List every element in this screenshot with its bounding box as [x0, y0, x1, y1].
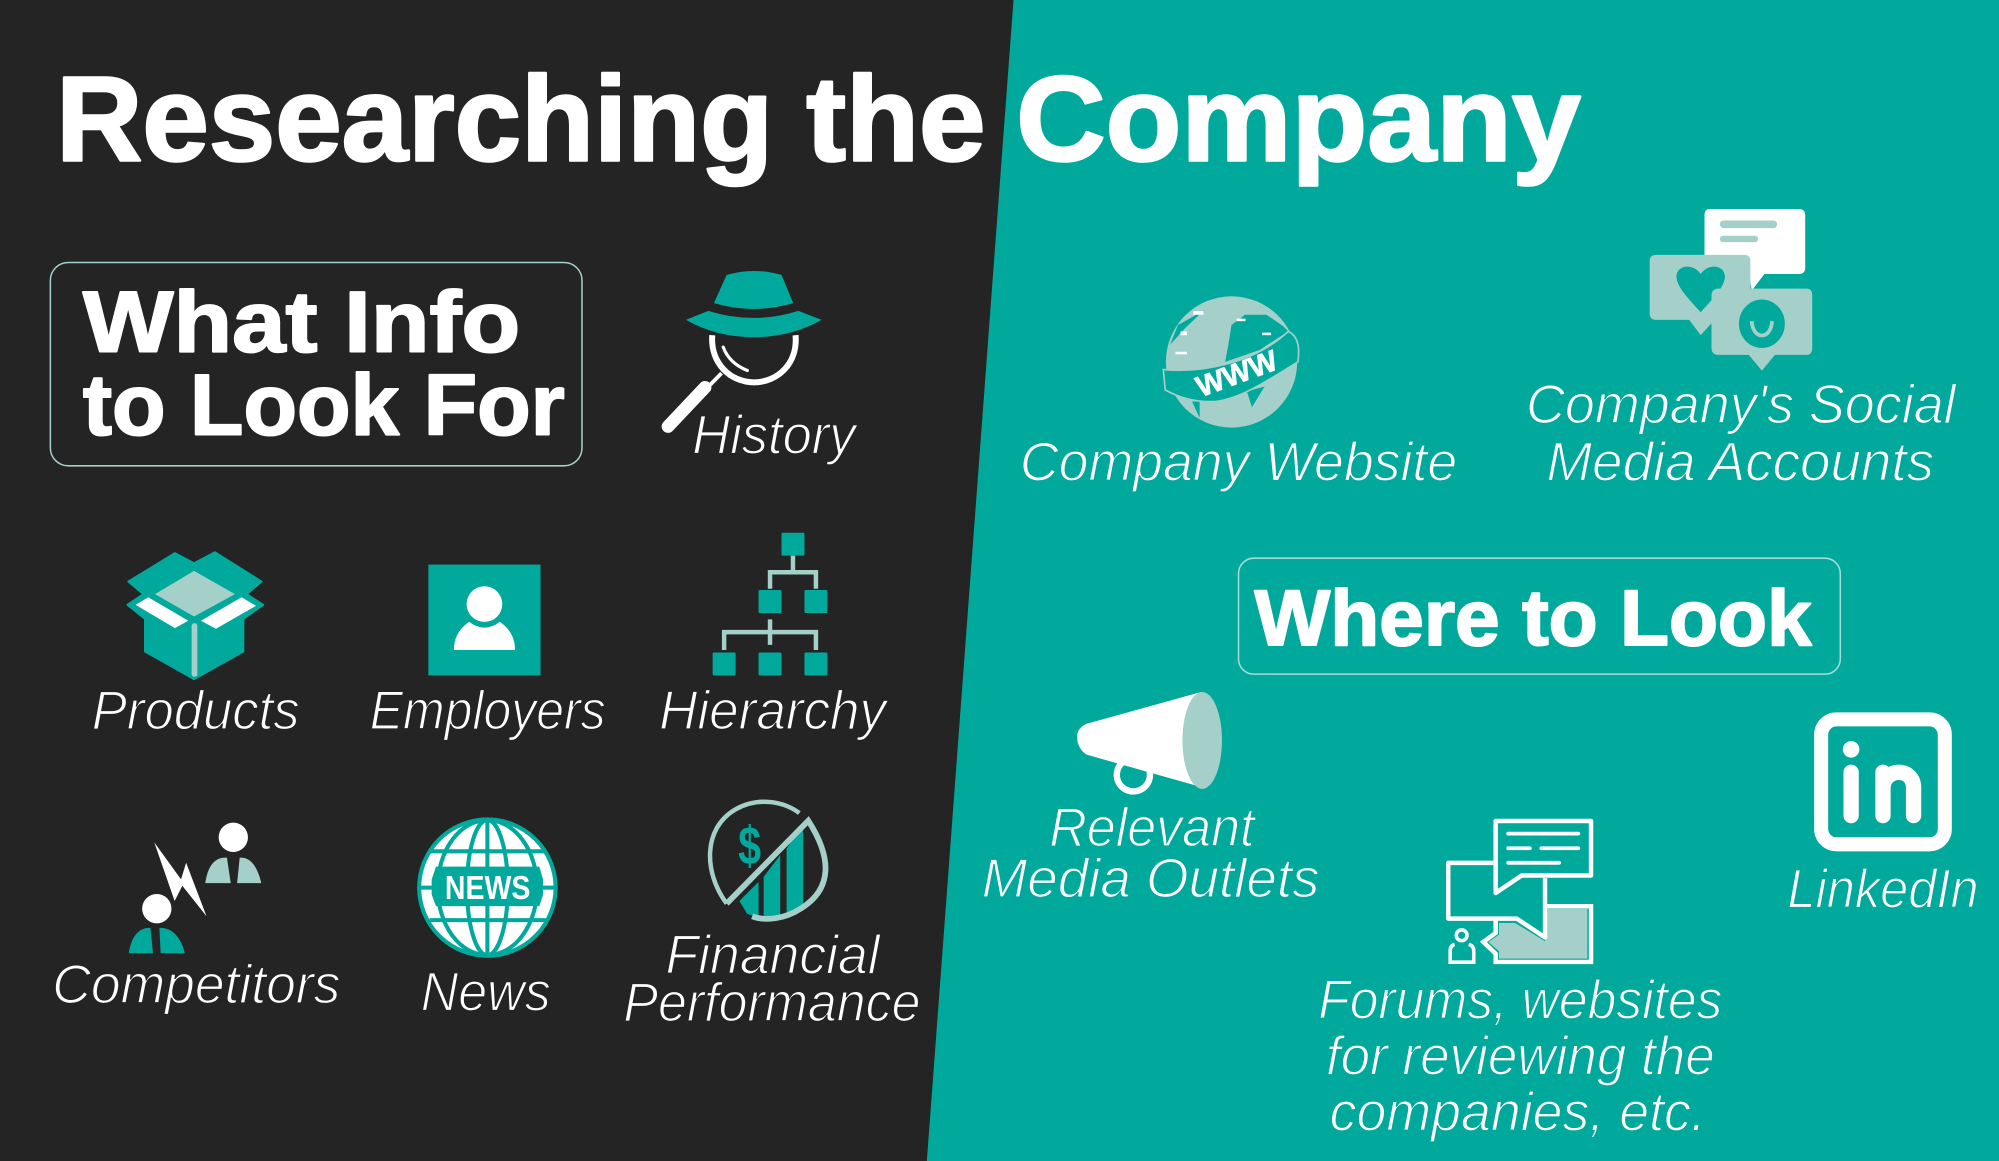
label: Company's Social Media Accounts: Company's Social [1526, 373, 1957, 435]
icon: forums and reviews [1448, 821, 1591, 962]
icon: website globe [1163, 296, 1299, 428]
icon: financial performance [710, 802, 826, 920]
title: Company [1016, 51, 1581, 187]
panel: where to look heading: Where to Look [1254, 573, 1813, 662]
label: History: History [692, 404, 859, 466]
panel: what info to look for heading: to Look For [83, 358, 565, 454]
label: Forums, websites for reviewing the companies, etc. [1318, 968, 1722, 1142]
panel: what info to look for heading [50, 263, 582, 466]
label: Financial Performance [623, 924, 920, 1033]
icon: employers [428, 565, 541, 675]
icon: news globe: NEWS [445, 870, 530, 907]
icon: hierarchy chart [713, 533, 827, 675]
label: Competitors: Competitors [52, 953, 340, 1015]
panel: where to look heading [1239, 558, 1840, 674]
label: Products: Products [92, 679, 300, 741]
label: Relevant Media Outlets: Relevant [1049, 796, 1257, 858]
label: News: News [421, 961, 551, 1023]
icon: social media bubbles [1650, 209, 1812, 370]
label: Forums, websites for reviewing the companies, etc.: for reviewing the [1326, 1024, 1715, 1086]
background: teal diagonal panel [927, 0, 1999, 1161]
label: Financial Performance: Performance [623, 971, 920, 1033]
label: Company's Social Media Accounts: Media Accounts [1546, 430, 1934, 492]
label: Employers: Employers [370, 679, 606, 741]
label: LinkedIn: LinkedIn [1787, 857, 1979, 919]
icon: history detective [668, 271, 822, 427]
icon: products box [127, 552, 263, 679]
title: Researching the [56, 51, 985, 187]
label: Forums, websites for reviewing the companies, etc.: Forums, websites [1318, 968, 1722, 1030]
icon: website globe: WWW [1192, 344, 1282, 404]
panel: what info to look for heading: What Info [83, 275, 520, 371]
icon: linkedin [1821, 719, 1945, 844]
icon: news globe [418, 818, 557, 957]
label: Forums, websites for reviewing the companies, etc.: companies, etc. [1330, 1080, 1706, 1142]
label: Hierarchy: Hierarchy [659, 679, 890, 741]
icon: megaphone [1077, 692, 1222, 791]
label: Company Website: Company Website [1020, 430, 1457, 492]
label: Relevant Media Outlets: Media Outlets [982, 847, 1319, 909]
label: Relevant Media Outlets [982, 796, 1319, 909]
title [56, 51, 1581, 187]
label: Company's Social Media Accounts [1526, 373, 1957, 492]
icon: financial performance: $ [738, 817, 761, 876]
icon: competitors [129, 823, 261, 953]
label: Financial Performance: Financial [665, 924, 881, 986]
